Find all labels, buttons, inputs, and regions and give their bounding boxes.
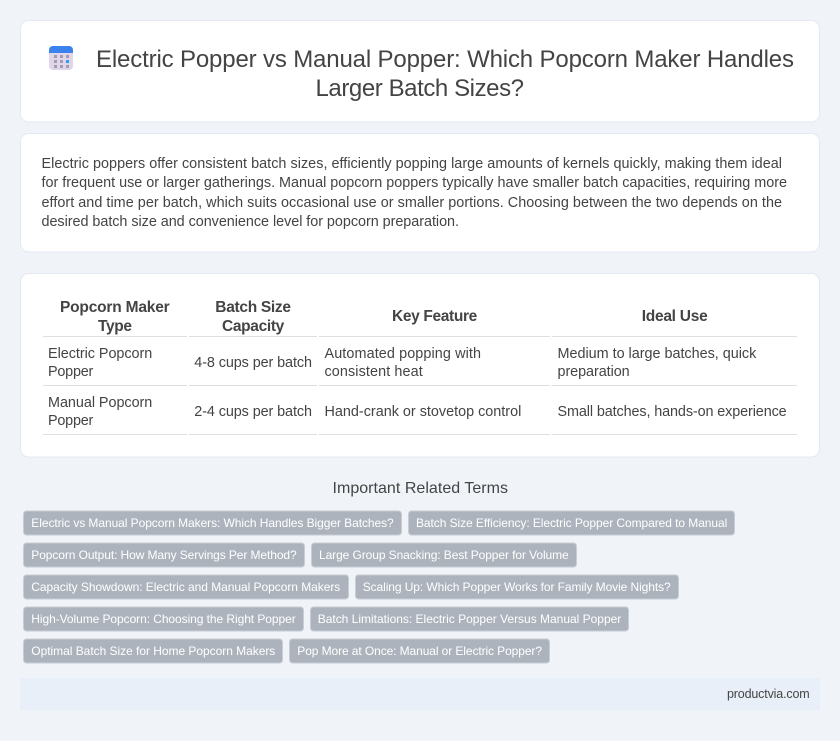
tag: batch limitations: Batch Limitations: Electric Popper Versus Manual Popper xyxy=(318,612,621,626)
intro paragraph: Electric poppers offer consistent batch sizes, efficiently popping large amounts of kernels quickly, making them ideal xyxy=(42,156,782,172)
title xyxy=(96,46,794,102)
table header row: Ideal Use xyxy=(642,308,708,325)
table row: electric popcorn popper: 4-8 cups per batch xyxy=(194,355,312,371)
tag: scaling up: Scaling Up: Which Popper Works for Family Movie Nights? xyxy=(363,580,671,594)
related term tags xyxy=(24,511,734,663)
table row: electric popcorn popper: Popper xyxy=(48,364,94,380)
intro paragraph: for frequent use or larger gatherings. Manual popcorn poppers typically have smaller batch capacities, requiring more xyxy=(42,175,787,191)
table header row xyxy=(60,299,708,335)
tag: large group snacking: Large Group Snacking: Best Popper for Volume xyxy=(319,548,569,562)
tag: pop more at once: Pop More at Once: Manual or Electric Popper? xyxy=(297,644,542,658)
tag: large group snacking xyxy=(312,543,576,567)
panel: title card xyxy=(20,20,820,122)
tag: optimal batch size xyxy=(24,639,282,663)
intro paragraph: desired batch size and convenience level for popcorn preparation. xyxy=(42,214,459,230)
tag: bigger batches: Electric vs Manual Popcorn Makers: Which Handles Bigger Batches? xyxy=(31,516,394,530)
tag: capacity showdown: Capacity Showdown: Electric and Manual Popcorn Makers xyxy=(31,580,340,594)
table row: electric popcorn popper: Medium to large batches, quick xyxy=(558,346,757,362)
table row: manual popcorn popper: Manual Popcorn xyxy=(48,395,152,411)
table row: electric popcorn popper: Electric Popcorn xyxy=(48,346,152,362)
table row: manual popcorn popper: Small batches, hands-on experience xyxy=(558,404,787,420)
heading: related terms: Important Related Terms xyxy=(332,480,508,497)
tag: batch size efficiency xyxy=(408,511,734,535)
tag: capacity showdown xyxy=(24,575,348,599)
table header row: Popcorn Maker xyxy=(60,299,170,316)
table row: electric popcorn popper xyxy=(48,346,757,380)
tag: batch limitations xyxy=(310,607,628,631)
icon: calendar xyxy=(49,46,73,70)
tag: optimal batch size: Optimal Batch Size for Home Popcorn Makers xyxy=(31,644,275,658)
table header row: Type xyxy=(98,318,132,335)
panel: intro text xyxy=(20,134,820,252)
table row: electric popcorn popper: preparation xyxy=(558,364,630,380)
footer bar xyxy=(20,678,820,710)
table row: electric popcorn popper: Automated popping with xyxy=(324,346,481,362)
tag: popcorn output xyxy=(24,543,304,567)
footer source: productvia.com xyxy=(727,687,810,701)
tag: high-volume popcorn xyxy=(24,607,304,631)
title: Larger Batch Sizes? xyxy=(316,75,524,102)
intro paragraph xyxy=(42,156,787,230)
table row: manual popcorn popper xyxy=(48,395,787,429)
table row: electric popcorn popper: consistent heat xyxy=(324,364,423,380)
tag: high-volume popcorn: High-Volume Popcorn: Choosing the Right Popper xyxy=(31,612,296,626)
title: Electric Popper vs Manual Popper: Which Popcorn Maker Handles xyxy=(96,46,794,73)
table row: manual popcorn popper: Popper xyxy=(48,413,94,429)
tag: pop more at once xyxy=(290,639,550,663)
tag: scaling up xyxy=(356,575,678,599)
intro paragraph: effort and time per batch, which suits occasional use or smaller portions. Choosing between the two depends on the xyxy=(42,195,782,211)
tag: popcorn output: Popcorn Output: How Many Servings Per Method? xyxy=(31,548,297,562)
table header row: Capacity xyxy=(222,318,285,335)
table row: manual popcorn popper: Hand-crank or stovetop control xyxy=(324,404,521,420)
table header row: Key Feature xyxy=(392,308,478,325)
tag: bigger batches xyxy=(24,511,402,535)
tag: batch size efficiency: Batch Size Efficiency: Electric Popper Compared to Manual xyxy=(416,516,727,530)
panel: comparison table xyxy=(20,274,820,457)
table header row: Batch Size xyxy=(215,299,291,316)
table row: manual popcorn popper: 2-4 cups per batch xyxy=(194,404,312,420)
